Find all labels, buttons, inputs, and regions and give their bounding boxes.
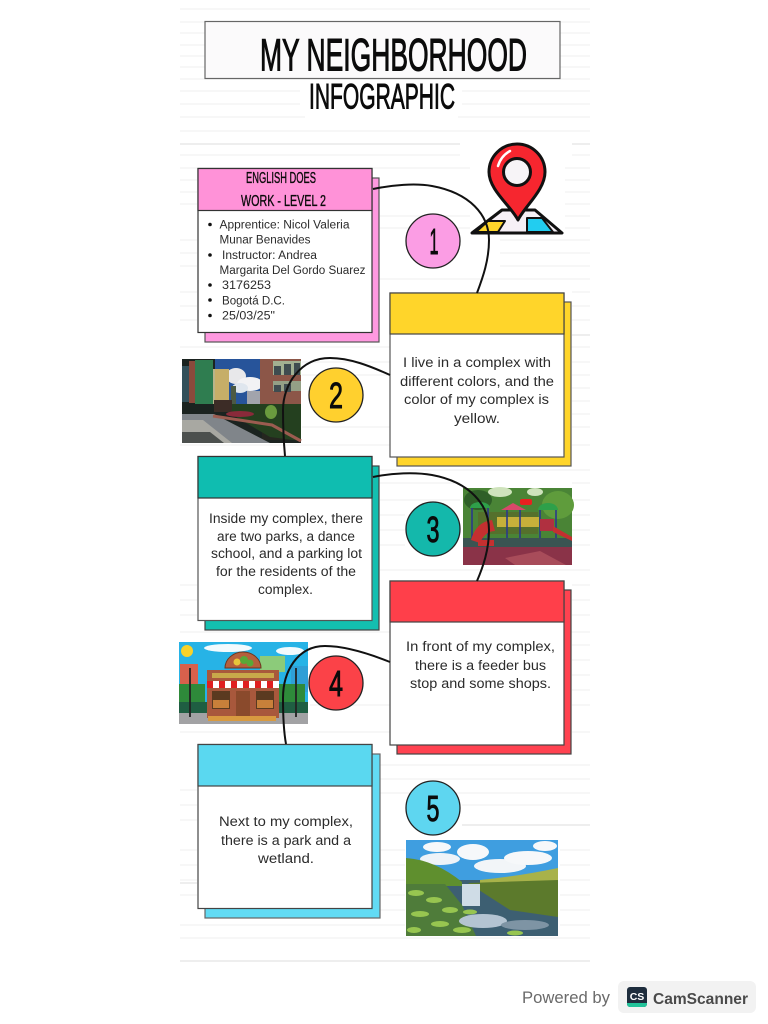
panel: teal card [198, 456, 379, 630]
blue card text [219, 814, 353, 866]
badge: number 5 [406, 781, 460, 835]
badge: number 4 [309, 656, 363, 710]
connector: teal card to red card [373, 473, 489, 581]
panel: yellow card [390, 293, 571, 466]
panel: red card [390, 581, 571, 754]
title [205, 22, 560, 80]
blue card text: wetland. [257, 851, 314, 866]
connector: card to yellow card [373, 185, 489, 293]
red card text: In front of my complex, [406, 639, 555, 654]
panel: blue card [198, 744, 380, 918]
footer: powered by CamScanner [522, 981, 756, 1013]
details list [208, 220, 366, 322]
card heading: ENGLISH DOES [246, 170, 316, 187]
photo: wetland [406, 840, 558, 936]
teal card text: complex. [258, 582, 313, 597]
teal card text: Inside my complex, there [209, 511, 363, 526]
yellow card text: yellow. [454, 411, 500, 426]
badge: number 1 [406, 214, 460, 268]
teal card text: are two parks, a dance [217, 529, 355, 544]
badge: number 1: 1 [430, 221, 438, 262]
teal card text: school, and a parking lot [211, 546, 362, 561]
blue card text: Next to my complex, [219, 814, 353, 829]
teal card text: for the residents of the [216, 564, 356, 579]
connector: yellow card to teal card [283, 358, 390, 456]
subtitle: INFOGRAPHIC [309, 78, 455, 116]
badge: number 3: 3 [426, 509, 440, 550]
photo: playground [463, 487, 574, 565]
details list: Bogotá D.C. [222, 296, 285, 308]
card heading: WORK - LEVEL 2 [241, 193, 326, 210]
details list: Margarita Del Gordo Suarez [220, 265, 366, 277]
badge: number 2 [309, 368, 363, 422]
panel: details card [198, 168, 379, 342]
icon: map pin [472, 144, 562, 233]
yellow card text: I live in a complex with [403, 355, 551, 370]
teal card text [209, 511, 363, 597]
photo: apartment buildings [182, 359, 301, 443]
details list: Munar Benavides [220, 234, 311, 246]
title: MY NEIGHBORHOOD [260, 30, 527, 80]
details list: 3176253 [222, 280, 271, 292]
footer: powered by CamScanner: CamScanner [653, 991, 748, 1008]
badge: number 2: 2 [329, 375, 343, 416]
subtitle [302, 78, 462, 116]
footer: powered by CamScanner: Powered by [522, 988, 610, 1007]
connector: red card to blue card [283, 646, 390, 744]
badge: number 3 [406, 502, 460, 556]
yellow card text: different colors, and the [400, 374, 554, 389]
footer: powered by CamScanner: CS [630, 991, 644, 1003]
details list: Instructor: Andrea [222, 250, 318, 262]
red card text: there is a feeder bus [415, 658, 546, 673]
illustration: fruit and vegetable shop [179, 642, 308, 724]
details list: 25/03/25" [222, 310, 275, 322]
card heading [241, 170, 326, 210]
yellow card text: color of my complex is [404, 392, 549, 407]
blue card text: there is a park and a [221, 833, 352, 848]
badge: number 5: 5 [426, 788, 440, 829]
red card text [406, 639, 555, 691]
yellow card text [400, 355, 554, 426]
badge: number 4: 4 [329, 663, 343, 704]
details list: Apprentice: Nicol Valeria [220, 220, 350, 232]
red card text: stop and some shops. [410, 676, 551, 691]
